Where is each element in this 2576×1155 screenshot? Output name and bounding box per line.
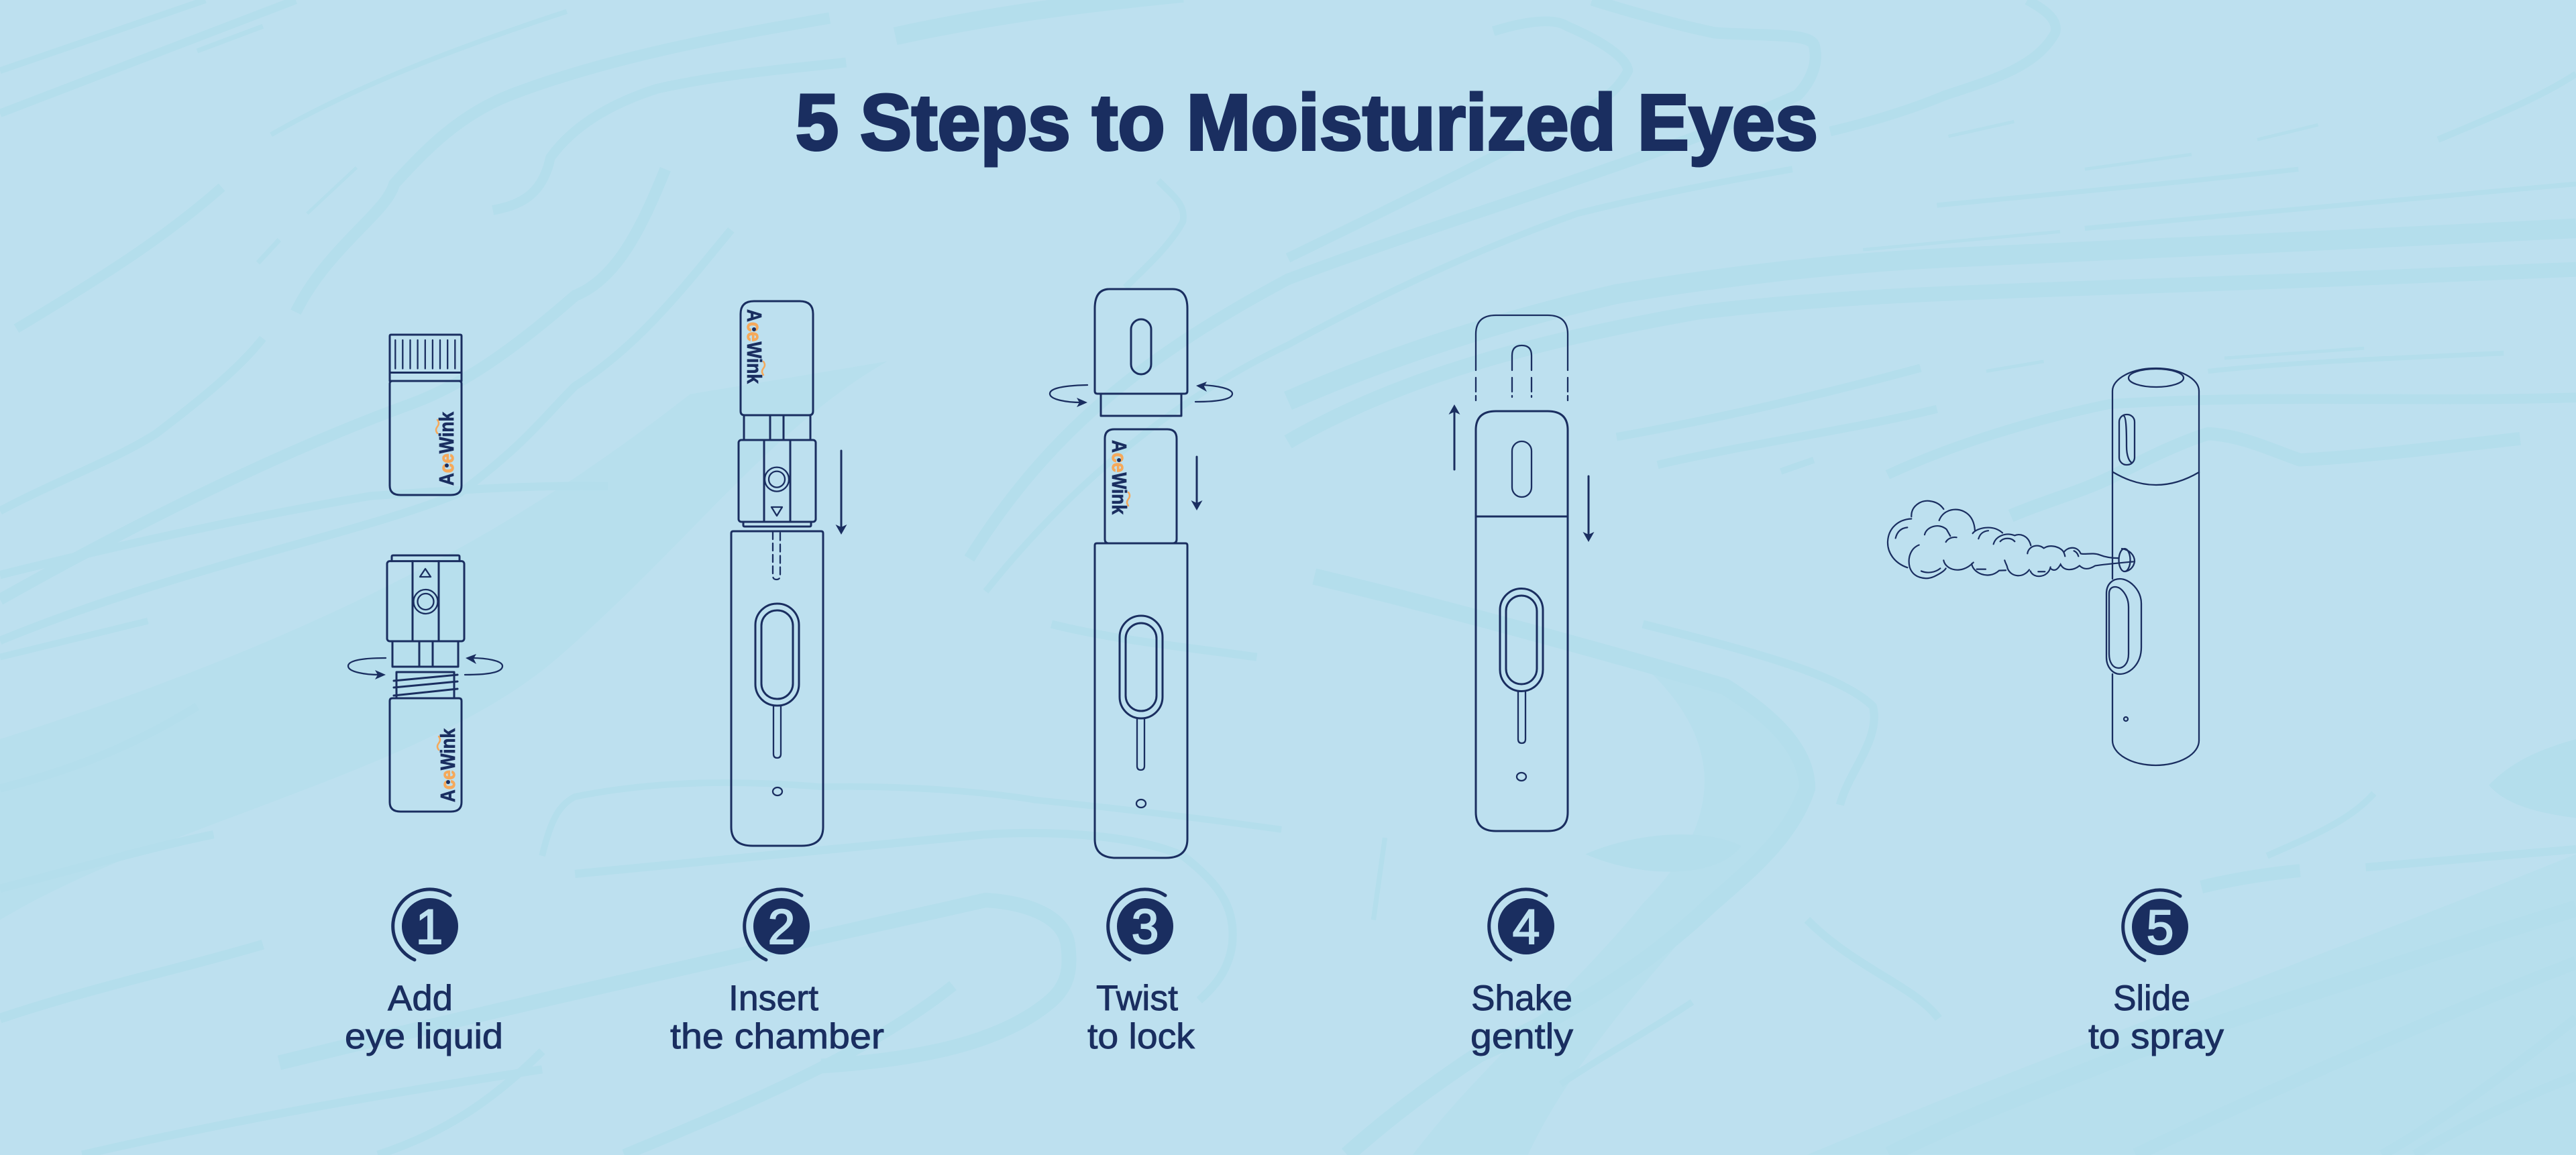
- badge 2: [745, 889, 810, 960]
- icon: rotate arrow right: [465, 654, 502, 675]
- label 1: Add: [388, 979, 453, 1018]
- badge 4: [1489, 889, 1554, 960]
- icon: arrow down: [1583, 476, 1594, 542]
- logo on cartridge: AceWink: [1108, 440, 1131, 515]
- icon: rotate arrow left: [1050, 385, 1087, 407]
- icon: cartridge: [1105, 429, 1177, 543]
- logo on bottle: AceWink: [435, 411, 458, 486]
- icon: ghost cap raised: [1476, 315, 1568, 400]
- logo on lower bottle: AceWink: [436, 728, 460, 802]
- label 2: [670, 979, 884, 1056]
- label 1: eye liquid: [345, 1017, 503, 1056]
- label 5: [2088, 979, 2224, 1056]
- badge 4: 4: [1513, 900, 1540, 954]
- icon: device body: [1095, 543, 1187, 858]
- panel: step 1 add eye liquid: [345, 335, 503, 1056]
- label 2: the chamber: [670, 1017, 884, 1056]
- icon: device closed: [1476, 411, 1568, 831]
- label 3: to lock: [1087, 1017, 1195, 1056]
- badge 3: [1108, 889, 1173, 960]
- label 1: [345, 979, 503, 1056]
- icon: lower bottle: [390, 698, 462, 812]
- badge 1: [393, 889, 458, 960]
- panel: step 4 shake gently: [1449, 315, 1594, 1056]
- icon: device body: [731, 531, 823, 846]
- icon: spray nozzle: [2118, 549, 2135, 571]
- title: 5 Steps to Moisturized Eyes: [796, 78, 1818, 167]
- icon: rotate arrow left: [348, 658, 386, 679]
- label 4: Shake: [1471, 979, 1572, 1018]
- icon: arrow up: [1449, 404, 1460, 470]
- label 5: to spray: [2088, 1017, 2224, 1056]
- icon: device cap: [1095, 289, 1187, 416]
- logo on cartridge: AceWink: [743, 309, 766, 384]
- label 3: [1087, 979, 1195, 1056]
- badge 5: 5: [2147, 901, 2174, 955]
- label 3: Twist: [1096, 979, 1178, 1018]
- badge 5: [2123, 890, 2188, 960]
- badge 1: 1: [416, 900, 443, 954]
- label 4: gently: [1470, 1017, 1574, 1056]
- icon: cartridge on connector: [739, 301, 816, 527]
- icon: arrow down: [836, 451, 847, 535]
- badge 3: 3: [1132, 900, 1159, 954]
- label 4: [1470, 979, 1574, 1056]
- panel: step 5 slide to spray: [1888, 368, 2224, 1056]
- panel: step 2 insert the chamber: [670, 301, 884, 1056]
- icon: rotate arrow right: [1195, 382, 1232, 402]
- label 5: Slide: [2113, 979, 2190, 1018]
- badge 2: 2: [768, 900, 795, 954]
- icon: device side view: [2106, 368, 2199, 765]
- label 2: Insert: [729, 979, 818, 1018]
- icon: arrow down: [1191, 457, 1202, 510]
- panel: step 3 twist to lock: [1050, 289, 1232, 1056]
- icon: chamber connector: [387, 555, 464, 698]
- icon: capped liquid bottle: [390, 335, 462, 495]
- icon: spray cloud: [1888, 501, 2133, 578]
